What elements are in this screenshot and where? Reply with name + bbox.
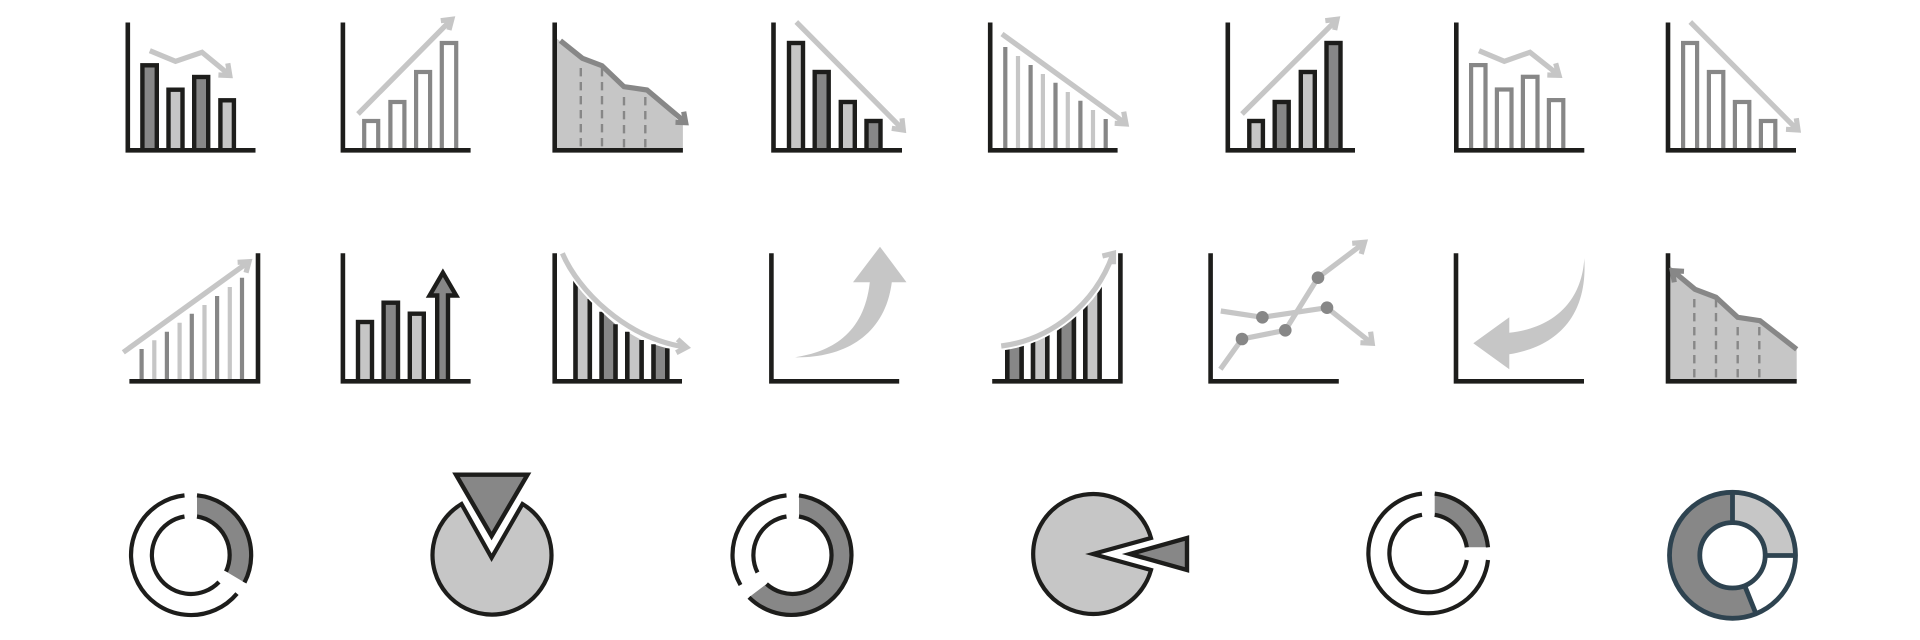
icon: segmented navy-outlined donut <box>1670 492 1796 618</box>
icon: two line series with dots <box>1211 242 1372 381</box>
icon: descending thin bars with arrow <box>990 22 1126 150</box>
icon: bars under rising curve <box>992 253 1120 381</box>
icon: pie with wedge pointing down <box>432 475 552 615</box>
icon: ascending thin bars with arrow <box>123 253 258 381</box>
icon: outline bars with falling zigzag arrow <box>1456 22 1584 150</box>
icon: area chart with arrow pointing up-left <box>1668 253 1797 381</box>
icon: bars under falling curve <box>555 253 686 381</box>
icon: big curved down arrow <box>1456 253 1585 381</box>
icon: falling area chart <box>555 22 686 150</box>
icon: descending outline bars with arrow <box>1668 22 1798 150</box>
icon: ascending filled bars with arrow <box>1228 19 1355 150</box>
icon: outline bars with rising arrow <box>343 19 471 150</box>
icon: donut with large dark segment <box>733 495 851 615</box>
icon: donut with quarter segment <box>1368 494 1488 613</box>
icon: donut with small dark segment <box>131 495 251 615</box>
icon: big curved up arrow <box>771 247 906 381</box>
icon: descending filled bars with arrow <box>774 22 903 150</box>
icon: bars with bold up arrow <box>343 253 471 381</box>
icon: pie with wedge pointing right <box>1033 494 1187 614</box>
icon: filled bars with falling zigzag arrow <box>128 22 256 150</box>
